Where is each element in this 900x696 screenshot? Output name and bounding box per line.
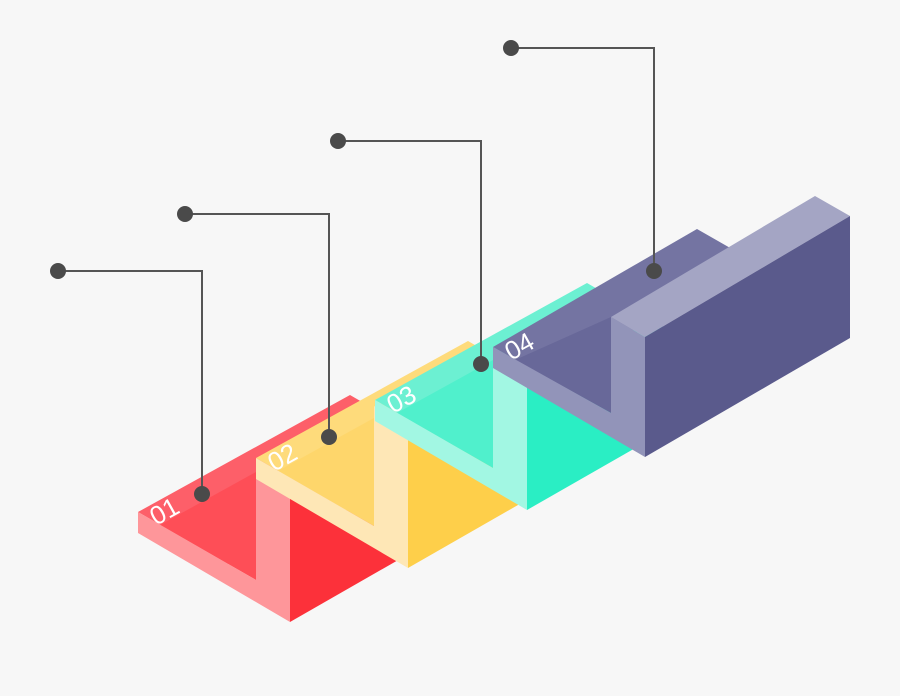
step 03 teal [375, 283, 677, 510]
label 02: 02 [262, 437, 302, 477]
label 03: 03 [381, 379, 421, 419]
step 04 purple [493, 196, 850, 457]
label 04: 04 [499, 326, 539, 366]
callout line 04 [503, 40, 662, 279]
label 01: 01 [144, 491, 184, 531]
callout line 03 [330, 133, 489, 372]
step 02 yellow [256, 341, 558, 568]
step 01 red [138, 395, 440, 622]
callout line 01 [50, 263, 210, 502]
callout line 02 [177, 206, 337, 445]
